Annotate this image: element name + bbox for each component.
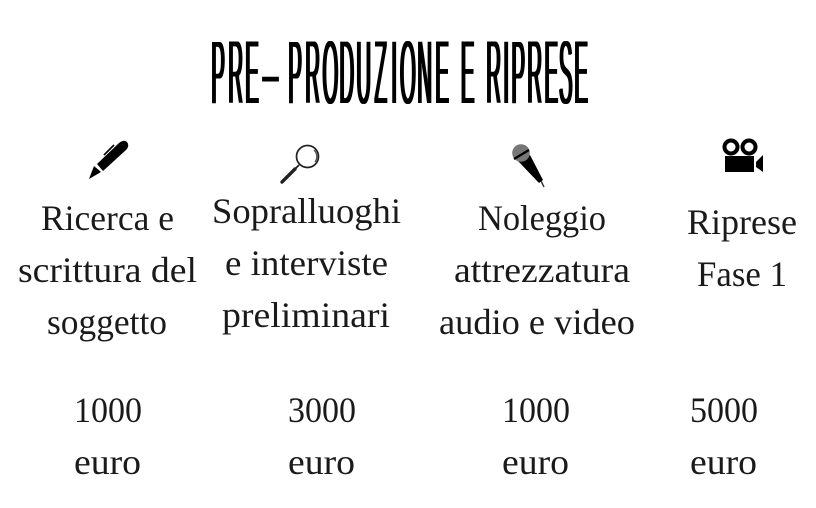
column 4 price: 5000 [690,390,758,430]
icon: video camera [724,140,763,172]
icon: microphone [512,144,544,187]
column 4 label: Fase 1 [697,254,787,294]
column 3 price: euro [502,442,569,482]
column 1 price: 1000 [74,390,142,430]
column 1 label: Ricerca e [41,198,174,238]
title: - [259,40,282,108]
column 2 price [288,390,356,482]
column 1 price [74,390,142,482]
column 4 price [690,390,758,482]
column 2 price: euro [288,442,355,482]
title: PRE [211,23,259,125]
column 2 label: e interviste [225,243,388,283]
icon: magnifying glass [282,146,318,182]
column 2 price: 3000 [288,390,356,430]
column 4 price: euro [690,442,757,482]
column 1 price: euro [74,442,141,482]
title: PRODUZIONE E RIPRESE [288,23,588,125]
column 3 price [502,390,570,482]
column 1 label [18,198,197,342]
icon: pen [89,141,128,179]
column 3 price: 1000 [502,390,570,430]
column 2 label: Sopralluoghi [212,191,401,231]
column 3 label: audio e video [439,302,635,342]
column 3 label: Noleggio [478,198,606,238]
column 1 label: soggetto [47,302,167,342]
column 1 label: scrittura del [18,250,197,290]
column 2 label [212,191,401,335]
column 4 label: Riprese [687,202,797,242]
column 4 label [687,202,797,294]
column 3 label [439,198,635,342]
column 2 label: preliminari [222,295,390,335]
column 3 label: attrezzatura [454,250,630,290]
